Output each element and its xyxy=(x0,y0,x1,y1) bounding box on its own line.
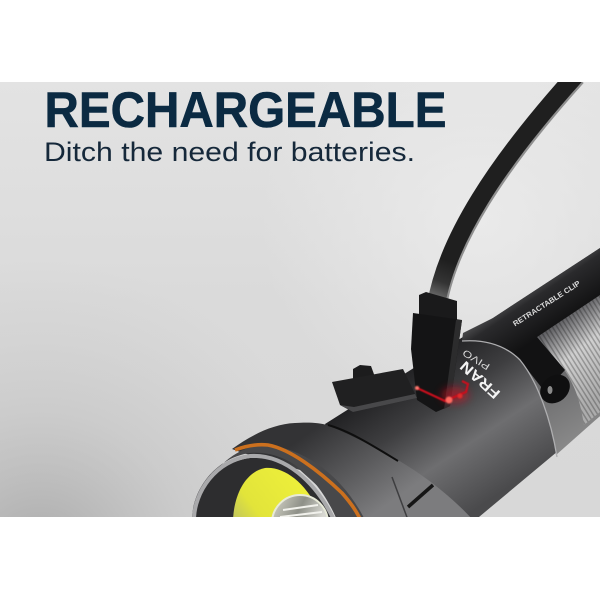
orange ring xyxy=(235,445,360,519)
red charging indicator xyxy=(415,381,469,404)
bright LED spots xyxy=(415,386,462,404)
red light line xyxy=(417,381,468,401)
product photo infographic xyxy=(0,82,600,517)
subtitle: Ditch the need for batteries. xyxy=(44,137,415,167)
head seam xyxy=(328,425,398,461)
silver bezel xyxy=(194,456,334,520)
photo background xyxy=(0,82,600,517)
yellow COB lens xyxy=(233,468,310,517)
title: RECHARGEABLE xyxy=(44,82,446,138)
label: pivot: PIVO xyxy=(461,347,492,372)
connector housing xyxy=(411,313,462,412)
rubber port cap xyxy=(332,365,417,412)
label: brand: FRAN xyxy=(457,357,504,401)
clip knob xyxy=(540,374,570,404)
rear gray section xyxy=(530,372,600,454)
dark collar with retractable clip xyxy=(462,248,600,392)
clip pin highlight xyxy=(548,386,552,394)
head slot xyxy=(408,485,433,507)
knurled grip xyxy=(537,295,600,425)
cap lower edge xyxy=(340,394,417,412)
cap tab xyxy=(353,365,375,381)
cap body xyxy=(332,369,417,412)
silver ring edge xyxy=(462,341,557,457)
LED reflector xyxy=(272,494,328,517)
flashlight body xyxy=(325,248,600,522)
label: retractable clip: RETRACTABLE CLIP xyxy=(511,279,582,328)
USB connector xyxy=(411,292,462,412)
flat cable band xyxy=(436,76,575,305)
charging cable xyxy=(436,76,577,305)
lens well xyxy=(195,458,333,520)
red glow xyxy=(441,387,469,403)
strain relief xyxy=(419,292,457,322)
flashlight head xyxy=(232,423,473,520)
flashlight xyxy=(192,248,600,517)
head side panel edge xyxy=(392,477,408,520)
cable highlight xyxy=(438,77,577,305)
connector side highlight xyxy=(444,320,462,409)
bezel band xyxy=(192,444,365,520)
